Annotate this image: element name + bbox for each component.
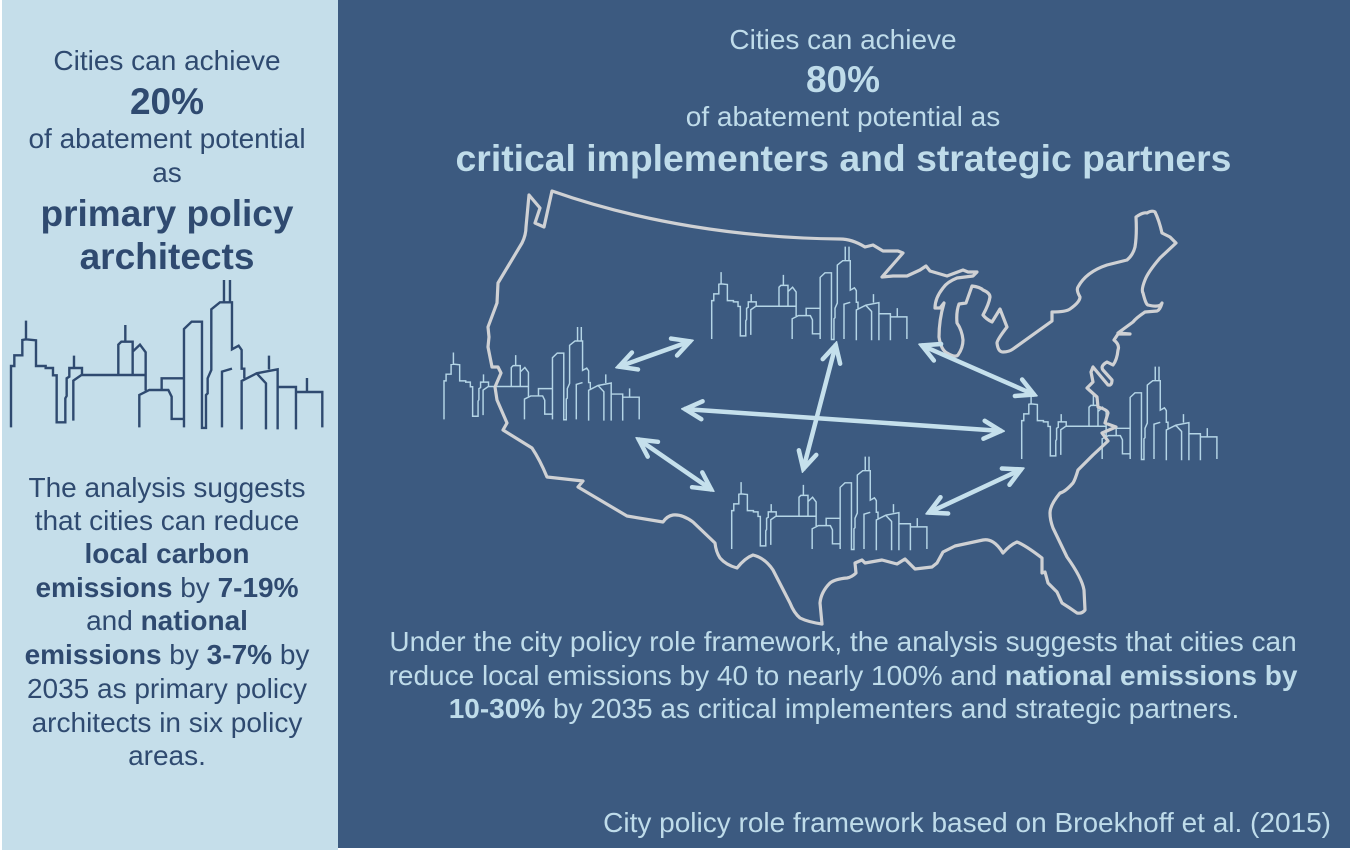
left panel body text: emissions by 7-19%	[35, 572, 299, 603]
arrow: south to east	[928, 469, 1022, 513]
right panel body text	[389, 626, 1298, 724]
left panel heading: of abatement potential	[28, 123, 306, 154]
source note: City policy role framework based on Broekhoff et al. (2015)	[603, 807, 1331, 838]
right panel heading	[456, 24, 1231, 179]
arrow: north to east	[921, 345, 1035, 395]
skyline: south	[732, 457, 927, 550]
left panel heading: architects	[80, 236, 254, 277]
left panel body text: that cities can reduce	[35, 505, 299, 536]
skyline: north	[712, 247, 907, 340]
left panel body text: 2035 as primary policy	[27, 673, 307, 704]
right panel body text: 10-30% by 2035 as critical implementers and strategic partners.	[449, 693, 1239, 724]
skyline: east	[1022, 367, 1217, 460]
right panel heading: critical implementers and strategic partners	[456, 137, 1231, 179]
right panel body text: Under the city policy role framework, the analysis suggests that cities can	[389, 626, 1297, 657]
left panel heading: as	[152, 157, 182, 188]
left panel body text: architects in six policy	[32, 707, 302, 738]
panel: primary policy architects	[2, 0, 338, 850]
right panel heading: 80%	[806, 59, 880, 100]
left panel body text: and national	[86, 605, 248, 636]
skyline: west	[444, 327, 639, 421]
arrow: west to south	[638, 439, 712, 490]
left panel body text	[25, 472, 309, 771]
left panel heading: primary policy	[41, 193, 294, 234]
right panel heading: Cities can achieve	[729, 24, 957, 55]
left panel body text: local carbon	[85, 538, 249, 569]
left panel heading: Cities can achieve	[53, 45, 281, 76]
icon: skyline	[11, 280, 322, 429]
right panel body text: reduce local emissions by 40 to nearly 100% and national emissions by	[389, 660, 1298, 691]
left panel body text: areas.	[128, 740, 206, 771]
left panel body text: emissions by 3-7% by	[25, 639, 309, 670]
arrow: north to south	[803, 344, 836, 470]
left panel body text: The analysis suggests	[28, 472, 306, 503]
arrow: west to north	[618, 341, 691, 367]
map: United States outline	[488, 191, 1176, 624]
panel: critical implementers and strategic partners	[338, 0, 1350, 848]
left panel heading: 20%	[130, 81, 204, 122]
left panel heading	[28, 45, 306, 277]
arrow: west to east	[684, 409, 1002, 431]
right panel heading: of abatement potential as	[686, 101, 1000, 132]
